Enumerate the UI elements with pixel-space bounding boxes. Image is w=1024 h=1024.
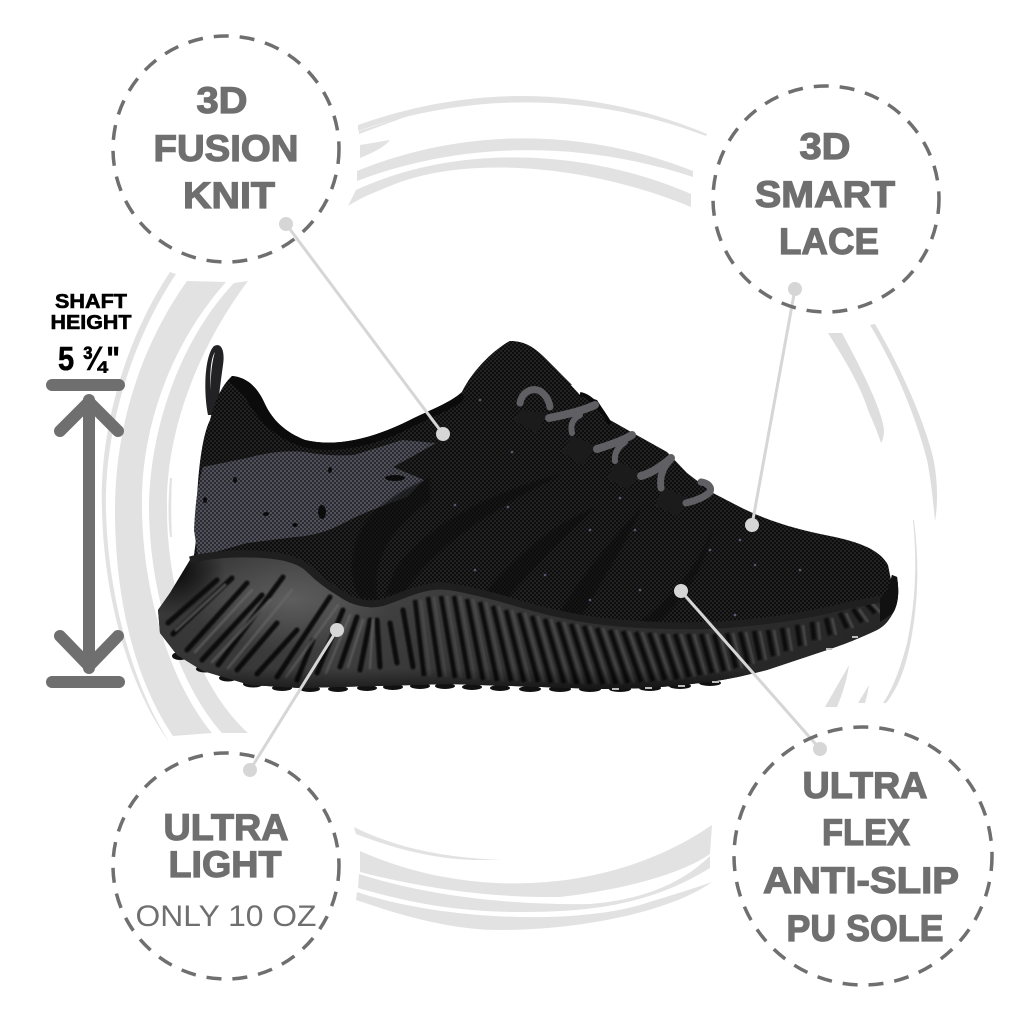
leader: ultra flex	[674, 584, 827, 756]
leader: 3D fusion knit	[279, 217, 450, 441]
tongue	[462, 341, 572, 395]
callout: ultra light: ULTRA	[164, 807, 288, 848]
leader: ultra light	[243, 623, 344, 777]
callout: 3D fusion knit	[113, 36, 339, 262]
collar	[228, 376, 464, 450]
heel ribs	[168, 577, 413, 680]
pull tab	[205, 345, 224, 415]
callout: 3D fusion knit: KNIT	[183, 175, 275, 216]
callout: 3D smart lace	[713, 86, 939, 312]
sole rim	[190, 554, 890, 626]
laces	[513, 390, 711, 517]
lace tabs	[513, 410, 688, 517]
callout: ultra flex anti-slip PU sole: ULTRA	[802, 765, 928, 806]
shaft height arrow	[52, 385, 119, 682]
callout: ultra flex anti-slip PU sole: PU SOLE	[786, 908, 944, 949]
overlay swooshes	[352, 475, 712, 625]
shoe upper	[190, 341, 892, 640]
callout: ultra flex anti-slip PU sole: ANTI-SLIP	[763, 860, 959, 901]
shaft height label: 5 ¾"	[58, 340, 120, 377]
shaft height label: HEIGHT	[50, 312, 132, 334]
shaft height label	[50, 291, 132, 377]
shaft height label: SHAFT	[55, 291, 127, 313]
patch splotches	[203, 467, 405, 527]
sole lugs	[172, 652, 721, 692]
sole	[158, 550, 898, 692]
sole bottom highlights	[612, 636, 858, 690]
background swirl: bottom arcs	[354, 825, 712, 930]
speckles	[454, 399, 801, 616]
callout: ultra light: ONLY 10 OZ	[136, 900, 316, 933]
background swirl: right arcs	[825, 324, 937, 707]
callout: 3D fusion knit: FUSION	[154, 128, 298, 169]
callout: ultra flex anti-slip PU sole: FLEX	[822, 812, 910, 853]
callout: 3D smart lace: SMART	[755, 174, 895, 215]
leader lines and dots	[243, 217, 827, 777]
callout: 3D fusion knit: 3D	[196, 80, 248, 121]
gray knit patch	[194, 440, 436, 557]
background swirl: left arcs	[102, 272, 248, 743]
callout: 3D smart lace: LACE	[779, 221, 879, 262]
callout: ultra light: LIGHT	[168, 844, 282, 885]
leader: 3D smart lace	[745, 282, 802, 532]
callout: ultra flex anti-slip PU sole	[734, 727, 992, 985]
background swirl: top arcs	[348, 96, 707, 207]
callout: ultra light	[113, 753, 339, 979]
toe cap	[880, 575, 898, 622]
mid and toe ribs	[415, 596, 881, 684]
callout: 3D smart lace: 3D	[800, 126, 850, 167]
